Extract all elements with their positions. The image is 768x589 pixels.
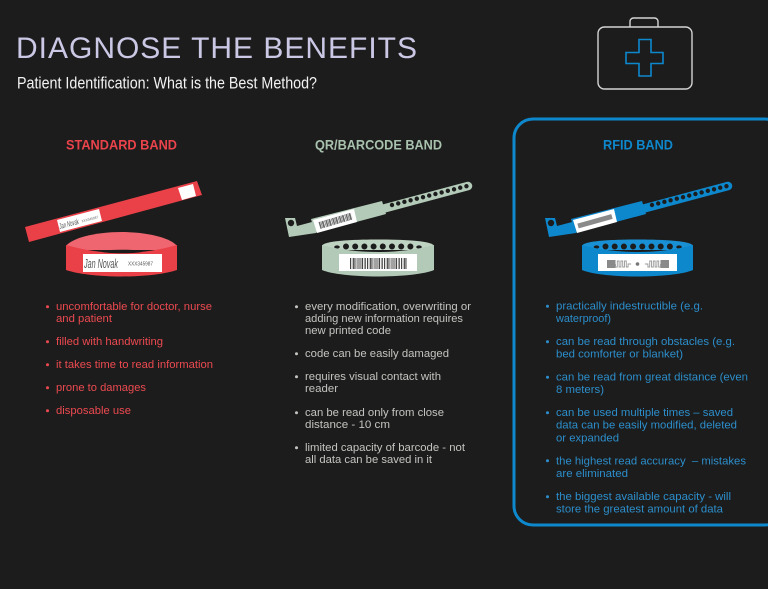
icon: closed barcode wristband xyxy=(322,240,434,276)
list: RFID band benefits: can be read through obstacles (e.g. xyxy=(556,336,735,348)
list: RFID band benefits: bed comforter or blanket) xyxy=(556,349,683,361)
icon: open RFID wristband xyxy=(545,186,728,237)
list: standard band drawbacks: uncomfortable for doctor, nurse xyxy=(56,301,212,313)
list: RFID band benefits: practically indestructible (e.g. xyxy=(556,301,703,313)
list: barcode band drawbacks: all data can be saved in it xyxy=(305,454,433,466)
list: barcode band drawbacks: new printed code xyxy=(305,325,391,337)
list: RFID band benefits: can be used multiple times – saved xyxy=(556,407,733,419)
list: barcode band drawbacks: adding new information requires xyxy=(305,313,463,325)
list: RFID band benefits: or expanded xyxy=(556,433,619,445)
list: barcode band drawbacks: every modification, overwriting or xyxy=(305,301,471,313)
list: standard band drawbacks: disposable use xyxy=(56,405,131,417)
list: RFID band benefits: waterproof) xyxy=(555,313,611,325)
list: RFID band benefits xyxy=(546,301,748,516)
icon: open standard wristband: Jan Novak xyxy=(58,217,80,231)
list: standard band drawbacks: and patient xyxy=(56,313,113,325)
title: DIAGNOSE THE BENEFITS xyxy=(16,32,417,65)
icon: open standard wristband xyxy=(25,181,202,242)
icon: closed RFID wristband xyxy=(582,240,693,276)
list: barcode band drawbacks: limited capacity of barcode - not xyxy=(305,442,466,454)
heading: QR/barcode band: QR/BARCODE BAND xyxy=(315,136,442,152)
list: RFID band benefits: can be read from great distance (even xyxy=(556,372,748,384)
list: barcode band drawbacks xyxy=(295,301,471,466)
list: RFID band benefits: data can be easily modified, deleted xyxy=(556,420,737,432)
list: barcode band drawbacks: can be read only from close xyxy=(305,407,444,419)
icon: closed standard wristband: Jan Novak xyxy=(83,256,119,271)
list: standard band drawbacks: it takes time to read information xyxy=(56,359,213,371)
heading: standard band: STANDARD BAND xyxy=(66,136,177,152)
list: RFID band benefits: are eliminated xyxy=(556,468,628,480)
list: standard band drawbacks xyxy=(46,301,213,417)
subtitle: Patient Identification: What is the Best Method? xyxy=(17,74,317,92)
heading: RFID band: RFID BAND xyxy=(603,136,673,152)
list: RFID band benefits: store the greatest amount of data xyxy=(556,504,724,516)
panel: standard band xyxy=(25,136,213,417)
icon: closed standard wristband xyxy=(66,232,177,276)
panel: QR/barcode band xyxy=(285,136,471,466)
icon: first aid kit xyxy=(598,18,692,89)
icon: open standard wristband: XXX345987 xyxy=(81,215,99,223)
list: barcode band drawbacks: distance - 10 cm xyxy=(305,419,390,431)
list: standard band drawbacks: filled with handwriting xyxy=(56,336,163,348)
list: standard band drawbacks: prone to damages xyxy=(56,382,146,394)
icon: closed standard wristband: XXX345987 xyxy=(128,262,153,268)
list: RFID band benefits: 8 meters) xyxy=(556,384,604,396)
panel: RFID highlight frame xyxy=(514,119,768,525)
list: barcode band drawbacks: code can be easily damaged xyxy=(305,348,449,360)
list: RFID band benefits: the highest read accuracy – mistakes xyxy=(556,456,746,468)
panel: RFID band xyxy=(545,136,748,516)
list: barcode band drawbacks: reader xyxy=(305,383,338,395)
list: barcode band drawbacks: requires visual contact with xyxy=(305,371,441,383)
list: RFID band benefits: the biggest available capacity - will xyxy=(556,491,731,503)
icon: open barcode wristband xyxy=(285,186,468,237)
